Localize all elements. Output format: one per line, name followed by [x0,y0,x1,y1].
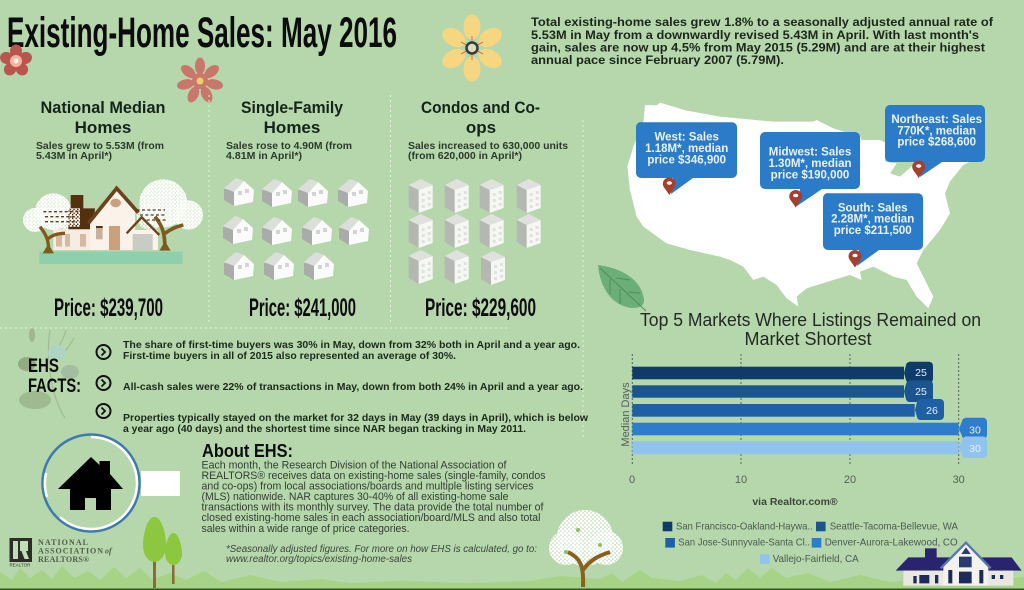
heading: National Median [40,98,166,117]
fact: all-cash sales [96,376,583,393]
chart: top 5 markets [620,310,987,565]
body text: Each month, the Research Division of the National Association of [202,460,507,472]
x axis ticks: 30 [953,474,965,486]
sales text [408,140,568,162]
logo: National Association of Realtors: ASSOCIATION [38,546,103,556]
icon: grid of houses [223,178,369,280]
chart title [640,310,981,349]
logo: National Association of Realtors: NATIONAL [38,538,88,547]
decorative sprig [18,328,79,418]
sales text: Sales rose to 4.90M (from [226,140,352,152]
sales text: (from 620,000 in April*) [408,150,522,162]
panel: national median homes [23,98,203,322]
logo: National Association of Realtors [10,538,113,568]
value labels: 25 [915,367,927,379]
icon: navy house [896,543,1022,586]
axis label: Median Days [620,382,632,447]
body text: closed existing-home sales in each association/board/MLS and also total [202,512,540,524]
heading: Single-Family [241,98,343,117]
body text: transactions with its monthly survey. The data provide the total number of [202,502,544,514]
body text: sales within a wide range of price categories. [202,523,410,535]
fact: first-time buyers: The share of first-time buyers was 30% in May, down from 32% both in April and a year ago. [123,339,580,351]
callout: South: 2.28M*, median [831,214,914,226]
callout: Midwest: Midwest: Sales [769,147,851,159]
fact: days on market [96,404,589,435]
legend: San Jose-Sunnyvale-Santa Cl.. [678,537,810,549]
heading: ops [466,118,496,137]
sales text: Sales grew to 5.53M (from [36,140,164,152]
intro paragraph: Total existing-home sales grew 1.8% to a seasonally adjusted annual rate of [531,15,994,29]
sales text: 4.81M in April*) [226,150,302,162]
callout: South [823,193,923,268]
value labels: 30 [969,443,981,455]
US outline [627,103,973,308]
intro paragraph: gain, sales are now up 4.5% from May 2015 (5.29M) and are at their highest [531,40,985,54]
callout: West: 1.18M*, median [645,143,728,155]
legend: San Francisco-Oakland-Haywa.. [676,520,813,532]
value labels: 26 [926,405,938,417]
heading: Condos and Co- [421,98,540,117]
source: via Realtor.com® [752,496,838,508]
callout: West [636,122,737,195]
heading [28,355,81,397]
x axis ticks [629,474,965,486]
chart title: Top 5 Markets Where Listings Remained on [640,310,981,330]
callout: Midwest: price $190,000 [771,169,849,181]
icon: yellow flower [439,14,505,82]
heading [241,98,343,137]
intro paragraph: annual pace since February 2007 (5.79M). [531,53,784,67]
fact: days on market: a year ago (40 days) and the shortest time since NAR began tracking in May 2011. [123,423,526,435]
fact: first-time buyers: First-time buyers in all of 2015 also represented an average of 30%. [123,350,456,362]
x axis ticks: 0 [629,474,635,486]
intro paragraph [531,15,994,67]
map: US regions [627,103,985,308]
logo: National Association of Realtors: REALTORS® [38,555,89,564]
callout: Midwest [760,132,860,208]
fact: days on market: Properties typically stayed on the market for 32 days in May (39 days in April), which is below [123,412,589,424]
fact: all-cash sales: All-cash sales were 22% of transactions in May, down from both 24% in April and a year ago. [123,381,583,393]
heading: Homes [75,118,131,137]
logo: National Association of Realtors: REALTOR [10,562,31,568]
heading: FACTS: [28,375,81,397]
x axis ticks: 10 [735,474,747,486]
icon: red flower [0,44,34,78]
panel: about EHS [202,441,546,565]
body text [202,460,546,535]
title: Existing-Home Sales: May 2016 [7,9,397,57]
icon: green leaf [598,265,646,311]
x axis ticks: 20 [844,474,856,486]
price: Price: $229,600 [425,294,536,322]
heading: About EHS: [202,441,293,461]
callout: West: price $346,900 [647,154,726,166]
legend: Vallejo-Fairfield, CA [773,553,859,565]
callout: Northeast: price $268,600 [897,137,976,149]
price: Price: $239,700 [54,294,163,322]
chart title: Market Shortest [744,329,872,349]
heading [40,98,166,137]
footnote [226,544,537,565]
value labels: 25 [915,386,927,398]
callout: Northeast [885,105,985,178]
panel: single-family homes [223,98,369,322]
body text: (MLS) nationwide. NAR captures 30-40% of all existing-home sale [202,491,508,503]
legend: Denver-Aurora-Lakewood, CO [825,537,958,549]
logo: National Association of Realtors: of [105,546,113,556]
panel: EHS facts [18,328,589,435]
bars [632,367,959,454]
callout: Midwest: 1.30M*, median [768,158,852,170]
icon: green trees [143,517,182,588]
sales text [36,140,164,162]
icon: grid of condo buildings [409,179,541,285]
value labels [904,362,987,458]
sales text [226,140,352,162]
heading [421,98,540,137]
callout: South: price $211,500 [834,225,912,237]
value labels: 30 [969,425,981,437]
legend: Seattle-Tacoma-Bellevue, WA [830,520,958,532]
icon: pink flower [176,58,224,104]
heading: EHS [28,355,59,377]
icon: house in circle [42,434,180,532]
footnote: *Seasonally adjusted figures. For more on how EHS is calculated, go to: [226,544,537,555]
callout: Northeast: 770K*, median [897,125,976,137]
sales text: Sales increased to 630,000 units [408,140,568,152]
icon: white blossom tree [549,510,623,587]
callout: West: West: Sales [655,132,719,144]
price: Price: $241,000 [249,294,356,322]
body text: REALTORS® receives data on existing-home sales (single-family, condos [202,470,546,482]
sales text: 5.43M in April*) [36,150,112,162]
callout: South: South: Sales [838,202,908,214]
icon: house with trees [23,179,203,264]
legend [663,520,958,565]
body text: and co-ops) from local associations/boards and multiple listing services [202,480,534,492]
heading: Homes [264,118,320,137]
footnote: www.realtor.org/topics/existing-home-sales [226,554,412,565]
callout: Northeast: Northeast: Sales [891,114,982,126]
intro paragraph: 5.53M in May from a downwardly revised 5.43M in April. With last month's [531,28,979,42]
grass strip [0,566,1024,589]
fact: first-time buyers [96,339,580,362]
panel: condos and co-ops [408,98,568,322]
